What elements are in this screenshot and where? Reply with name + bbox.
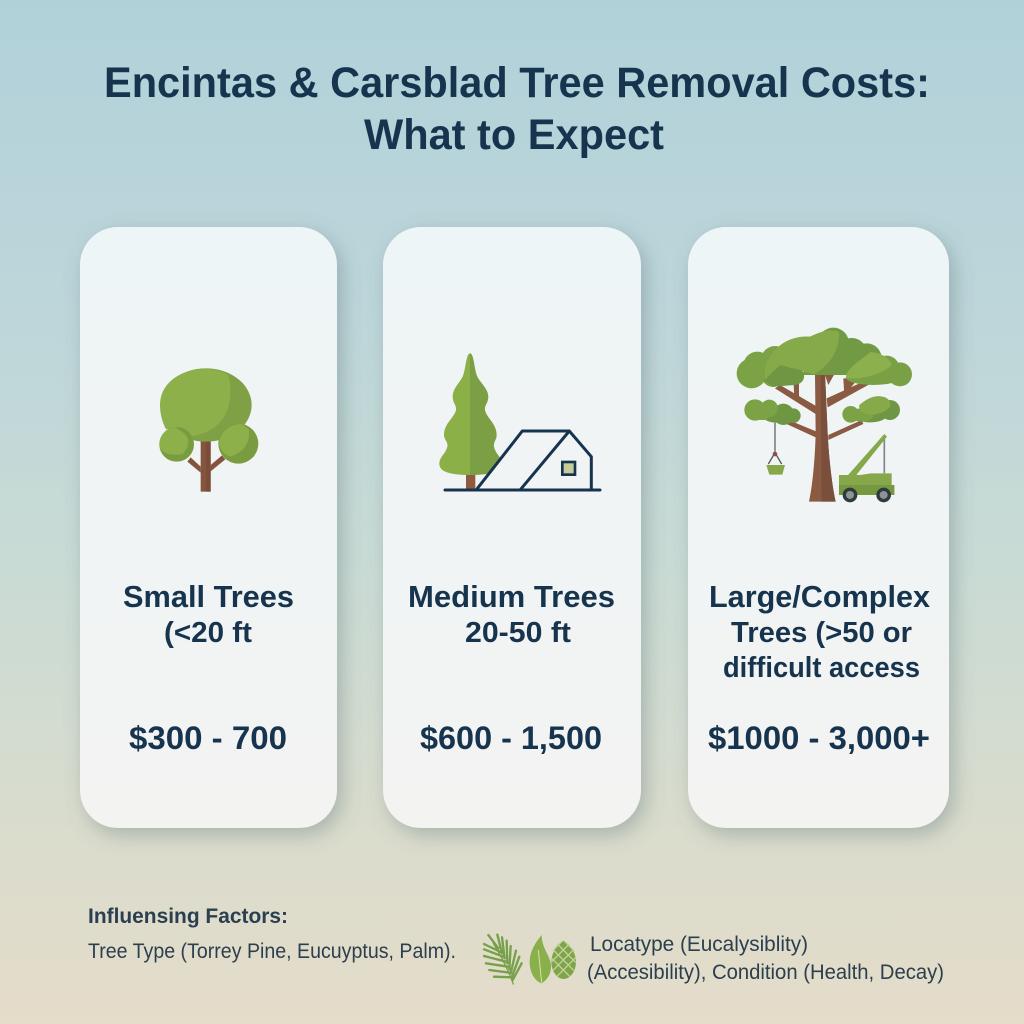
price: medium trees: $600 - 1,500: [420, 720, 602, 756]
label: large trees: [709, 580, 930, 684]
label: large trees: Large/Complex: [709, 580, 930, 614]
factors text: location and condition: Locatype (Eucalysiblity): [590, 933, 808, 956]
label: medium trees: 20-50 ft: [465, 617, 571, 649]
factors text: tree type: Tree Type (Torrey Pine, Eucuyptus, Palm).: [88, 940, 456, 963]
panel: large trees: [688, 227, 949, 828]
title: What to Expect: [364, 111, 664, 159]
panel: small trees: [80, 227, 337, 828]
icon: small tree: [159, 368, 258, 492]
icon: large tree with crane: [737, 328, 912, 502]
label: large trees: Trees (>50 or: [731, 617, 912, 649]
factors text: location and condition: (Accesibility), Condition (Health, Decay): [587, 961, 944, 984]
title: [104, 59, 930, 159]
factors heading: Influensing Factors:: [88, 904, 288, 928]
label: large trees: difficult access: [723, 652, 920, 684]
title: Encintas & Carsblad Tree Removal Costs:: [104, 59, 930, 107]
label: medium trees: [408, 580, 615, 649]
factors text: location and condition: [587, 933, 944, 984]
price: small trees: $300 - 700: [129, 720, 287, 756]
price: large trees: $1000 - 3,000+: [708, 720, 930, 756]
label: small trees: (<20 ft: [164, 617, 252, 649]
label: small trees: [123, 580, 294, 649]
label: medium trees: Medium Trees: [408, 580, 615, 614]
label: small trees: Small Trees: [123, 580, 294, 614]
panel: medium trees: [383, 227, 641, 828]
icon: palm leaf, leaf and pine cone: [484, 935, 580, 984]
icon: tree and house: [439, 353, 600, 490]
